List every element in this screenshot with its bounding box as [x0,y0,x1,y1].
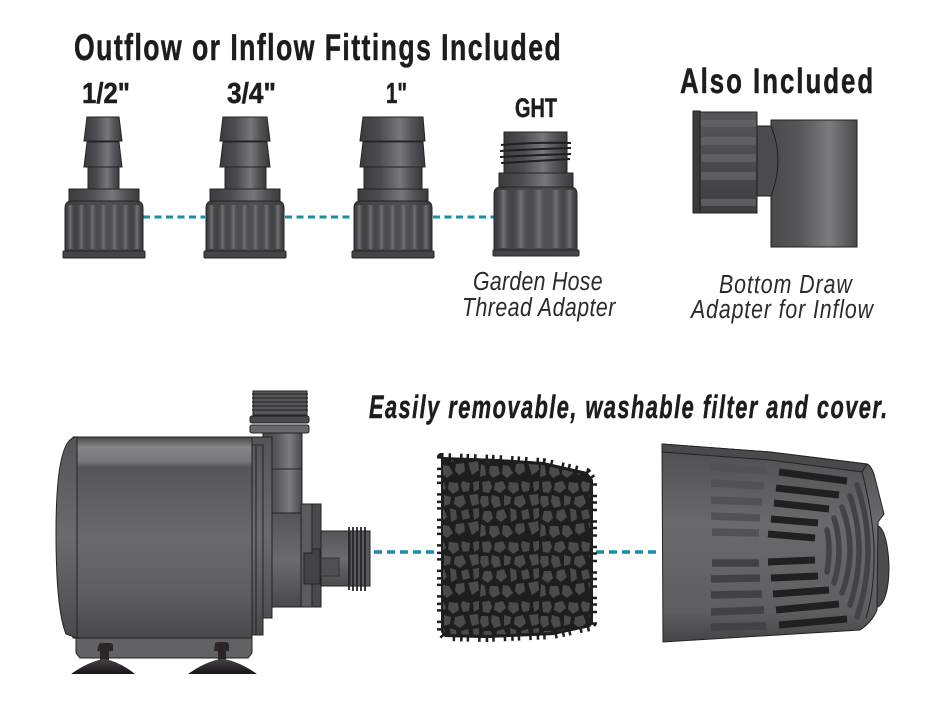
pump ring [251,437,272,635]
curved vent slots [827,485,868,617]
cover shell [662,444,884,642]
icon: foam filter [441,457,593,638]
pump end cap [56,437,77,638]
connector: dashed lines from pump to filter to cover [374,550,661,554]
icon: one inch barbed fitting [352,117,434,258]
caption: garden hose thread adapter: Thread Adapter [462,293,616,323]
right vent slots [768,472,847,625]
lower left vent slots [711,563,766,627]
pump feet [71,638,257,674]
icon: bottom draw adapter [693,111,857,247]
heading: removable filter and cover: Easily removable, washable filter and cover. [369,389,887,425]
label: one half inch: 1/2" [82,78,130,110]
caption: bottom draw adapter: Adapter for Inflow [689,295,875,325]
icon: pump [56,391,370,674]
caption: bottom draw adapter: Bottom Draw [719,270,853,300]
caption: garden hose thread adapter: Garden Hose [473,267,603,297]
label: one inch: 1" [386,78,407,110]
upper left vent slots [711,467,767,533]
label: three quarter inch: 3/4" [227,78,276,110]
icon: three quarter inch barbed fitting [204,117,286,258]
heading: also included: Also Included [680,61,873,101]
icon: half inch barbed fitting [63,117,145,258]
caption: garden hose thread adapter [462,267,616,323]
cover knob [873,525,889,607]
label: GHT: GHT [515,93,557,123]
title: outflow or inflow fittings: Outflow or Inflow Fittings Included [74,27,561,68]
pump body [73,437,252,638]
caption: bottom draw adapter [689,270,875,325]
icon: pump cover [662,444,889,642]
icon: garden hose thread adapter [493,132,579,256]
pump side outlet [272,504,370,607]
connector: dashed lines between fittings [143,216,494,218]
pump top outlet [250,391,309,520]
